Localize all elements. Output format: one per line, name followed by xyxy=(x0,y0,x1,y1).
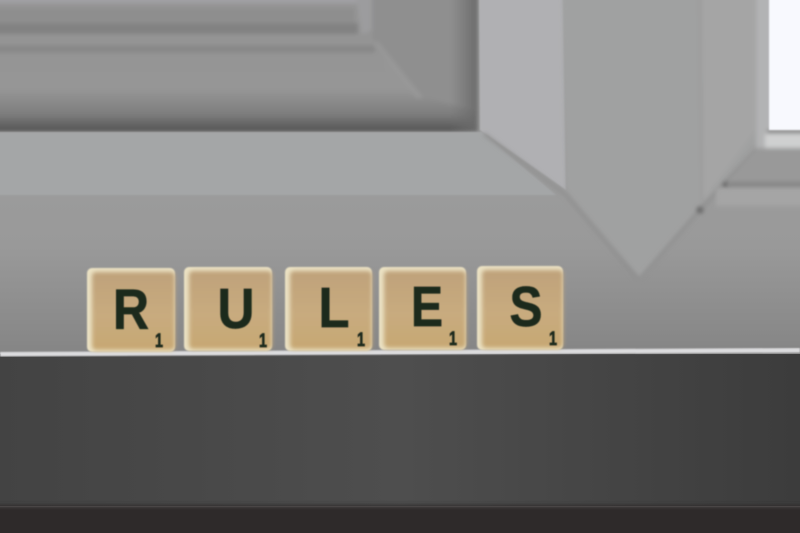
tile: L xyxy=(285,267,372,351)
window frame xyxy=(716,0,800,206)
tile: S: S xyxy=(510,275,542,339)
tile: L: L xyxy=(318,276,350,340)
tile: R xyxy=(87,268,175,352)
tile: U: U xyxy=(218,277,254,341)
sill shadow band xyxy=(0,505,800,533)
upper window panel xyxy=(0,0,478,132)
tile: E xyxy=(379,267,466,350)
sill front face xyxy=(0,354,800,506)
window glass xyxy=(769,0,800,130)
horizontal ledge xyxy=(0,132,556,195)
background wall xyxy=(0,0,800,354)
sill highlight edge xyxy=(0,348,800,356)
tile: U xyxy=(184,267,272,352)
tile: E: 1 xyxy=(449,329,457,350)
tile: U: 1 xyxy=(259,331,267,352)
door panel, centre face xyxy=(563,0,762,278)
tile: S xyxy=(477,266,563,350)
tile: R: R xyxy=(113,278,149,342)
door panel, light face xyxy=(479,0,566,190)
tile: E: E xyxy=(411,275,443,339)
tile: L: 1 xyxy=(357,330,365,351)
tile: S: 1 xyxy=(549,329,557,350)
door panel edge lines xyxy=(484,134,757,280)
tile: R: 1 xyxy=(155,331,163,352)
